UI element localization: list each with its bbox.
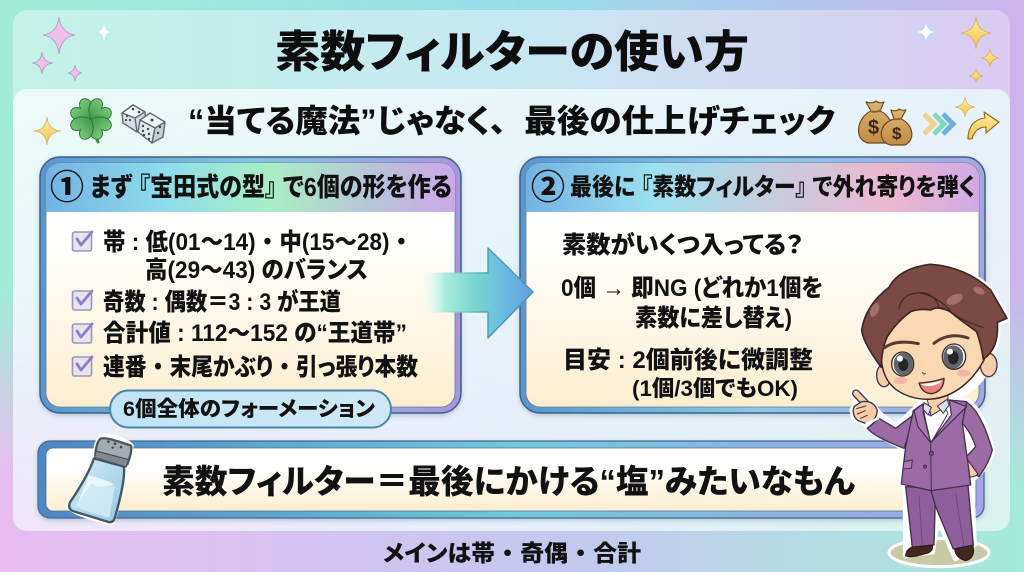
money bag dollar signs: $ bbox=[868, 117, 879, 139]
nose bbox=[923, 373, 925, 374]
ground shadow bbox=[889, 539, 989, 567]
icon: dice bbox=[122, 105, 165, 143]
header panel bbox=[13, 10, 1010, 140]
hip hand bbox=[953, 459, 978, 477]
panel 2 heading: 最後に 『素数フィルター』 で外れ寄りを弾く bbox=[570, 173, 975, 201]
panel: step 1 bbox=[40, 157, 461, 428]
panel 2 rule line 2: 素数に差し替え) bbox=[635, 305, 792, 332]
face bbox=[881, 306, 985, 399]
icon: money bags bbox=[859, 101, 912, 145]
panel 2 guide: 目安 : 2個前後に微調整 bbox=[563, 346, 813, 374]
panel 2 rule: 0個 → 即NG (どれか1個を bbox=[561, 275, 823, 302]
panel 2 body bbox=[526, 163, 979, 407]
panel: step 2 bbox=[520, 157, 985, 413]
pill label: 6個全体のフォーメーション bbox=[123, 398, 375, 421]
ears bbox=[877, 353, 997, 387]
panel 1 frame bbox=[40, 157, 461, 413]
icon: chevrons bbox=[924, 114, 953, 134]
panel: conclusion bbox=[38, 441, 984, 518]
hair bbox=[862, 264, 1007, 367]
pill label bbox=[110, 390, 391, 428]
arrow bbox=[422, 248, 533, 338]
sparkle: small gold bbox=[955, 97, 975, 117]
jacket lapels bbox=[914, 400, 967, 443]
neck bbox=[926, 390, 948, 417]
icon: salt shaker bbox=[66, 434, 134, 526]
jacket bbox=[901, 400, 971, 491]
main panel bbox=[13, 89, 1010, 531]
item 4: 連番 ・ 末尾かぶり ・ 引っ張り本数 bbox=[103, 354, 418, 381]
sparkles: top left bbox=[32, 17, 113, 81]
panel 1 heading: まず 『宝田式の型』 で6個の形を作る bbox=[90, 172, 452, 202]
sparkle: gold left bbox=[34, 117, 61, 145]
eyebrows bbox=[885, 336, 968, 348]
icon: four leaf clover bbox=[68, 96, 114, 142]
panel 2 heading number: ② bbox=[531, 169, 565, 207]
shirt bbox=[923, 407, 948, 443]
subtitle: “当てる魔法”じゃなく、 最後の仕上げチェック bbox=[188, 103, 835, 139]
panel 2 question: 素数がいくつ入ってる？ bbox=[562, 231, 803, 259]
character: man in purple suit bbox=[852, 264, 1007, 567]
item 3: 合計値 : 112～152 の“王道帯” bbox=[103, 320, 407, 347]
title: 素数フィルターの使い方 bbox=[275, 28, 749, 77]
money bag dollar signs: $ bbox=[892, 124, 902, 143]
jacket details bbox=[903, 443, 933, 491]
conclusion text: 素数フィルター＝最後にかける“塩”みたいなもん bbox=[162, 463, 855, 500]
pointing arm bbox=[867, 413, 916, 448]
blush bbox=[894, 370, 970, 384]
mouth bbox=[919, 378, 944, 394]
panel 2 guide line 2: (1個/3個でもOK) bbox=[632, 376, 798, 401]
item 2: 奇数 : 偶数＝3 : 3 が王道 bbox=[103, 288, 341, 316]
panel 1 header band bbox=[46, 163, 455, 212]
shoes bbox=[906, 545, 974, 561]
eyes bbox=[892, 344, 966, 376]
item 1 line 2: 高(29～43) のバランス bbox=[145, 257, 368, 284]
item 1: 帯 : 低(01～14) ・ 中(15～28) ・ bbox=[103, 229, 407, 256]
panel 1 body bbox=[46, 163, 455, 407]
money bag dollar signs bbox=[868, 117, 902, 143]
hair highlights bbox=[868, 285, 986, 318]
sparkles: top right bbox=[915, 17, 999, 82]
right arm bbox=[962, 402, 992, 477]
white sticker halo bbox=[852, 264, 1007, 558]
checklist bbox=[72, 229, 418, 381]
footer caption: メインは帯 ・ 奇偶 ・ 合計 bbox=[383, 540, 641, 566]
pointing hand bbox=[853, 393, 878, 424]
icon: curved arrow bbox=[968, 112, 999, 139]
trousers bbox=[906, 485, 973, 549]
check icons bbox=[72, 232, 92, 376]
panel 1 heading number: ① bbox=[50, 169, 84, 207]
panel 2 header band bbox=[526, 163, 979, 212]
panel 2 frame bbox=[520, 157, 985, 413]
